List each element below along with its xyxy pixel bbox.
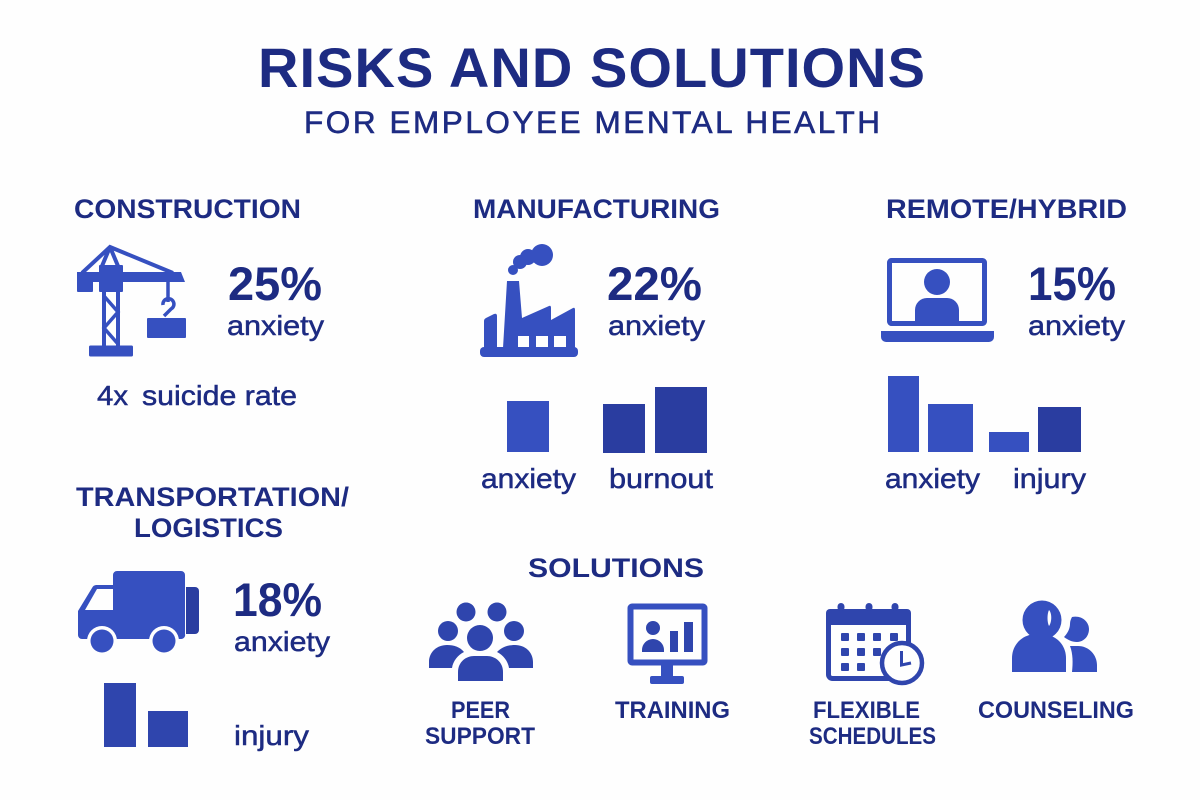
- label: peer support: PEER: [451, 697, 510, 724]
- bar chart: manufacturing: burnout: [609, 463, 713, 494]
- statistic: 25% anxiety: anxiety: [227, 310, 324, 341]
- panel: remote/hybrid: [881, 194, 1127, 494]
- label: peer support: [425, 697, 535, 750]
- statistic: 22% anxiety: [607, 257, 705, 341]
- icon: tower crane: [77, 247, 186, 356]
- label: counseling: COUNSELING: [978, 697, 1134, 724]
- label: peer support: SUPPORT: [425, 723, 535, 750]
- title: FOR EMPLOYEE MENTAL HEALTH: [304, 104, 880, 140]
- statistic: 15% anxiety: anxiety: [1028, 310, 1125, 341]
- icon: delivery truck: [78, 571, 199, 656]
- statistic: 22% anxiety: anxiety: [608, 310, 705, 341]
- bar chart: remote/hybrid: anxiety: [885, 463, 980, 494]
- statistic: 25% anxiety: 25%: [228, 257, 322, 310]
- label: flexible schedules: [809, 697, 936, 750]
- bar chart: manufacturing: [481, 387, 713, 494]
- statistic: 15% anxiety: [1028, 257, 1125, 341]
- label: flexible schedules: SCHEDULES: [809, 723, 936, 750]
- panel: transportation/logistics: [76, 482, 350, 751]
- statistic: 4x suicide rate: suicide rate: [142, 380, 297, 411]
- panel: manufacturing: [473, 194, 720, 494]
- panel: construction: [74, 194, 324, 411]
- label: training: TRAINING: [615, 697, 730, 724]
- bar chart: transportation: [104, 683, 309, 751]
- title: [258, 36, 925, 140]
- heading: solutions: SOLUTIONS: [528, 553, 704, 583]
- heading: manufacturing: MANUFACTURING: [473, 194, 720, 224]
- statistic: 18% anxiety: [233, 573, 330, 657]
- heading: transportation/logistics: TRANSPORTATION/: [76, 482, 350, 512]
- heading: construction: CONSTRUCTION: [74, 194, 301, 224]
- solution: training: [615, 606, 730, 724]
- bar chart: manufacturing: anxiety: [481, 463, 576, 494]
- solution: flexible schedules: [809, 603, 936, 750]
- title: RISKS AND SOLUTIONS: [258, 36, 925, 99]
- bar chart: remote/hybrid: injury: [1013, 463, 1086, 494]
- heading: transportation/logistics: [76, 482, 350, 543]
- icon: factory: [480, 244, 578, 357]
- label: flexible schedules: FLEXIBLE: [813, 697, 920, 724]
- icon: laptop video call: [881, 260, 994, 342]
- solution: peer support: [425, 602, 535, 750]
- solution: counseling: [978, 600, 1134, 724]
- statistic: 18% anxiety: 18%: [233, 573, 322, 626]
- heading: transportation/logistics: LOGISTICS: [134, 513, 283, 543]
- statistic: 25% anxiety: [227, 257, 324, 341]
- statistic: 15% anxiety: 15%: [1028, 257, 1116, 310]
- panel: solutions: [425, 553, 1134, 750]
- bar chart: transportation: injury: [234, 720, 309, 751]
- statistic: 4x suicide rate: 4x: [97, 380, 128, 411]
- icon: presentation monitor: [630, 606, 704, 684]
- icon: calendar with clock: [826, 603, 922, 683]
- bar chart: remote/hybrid: [885, 376, 1086, 494]
- heading: remote/hybrid: REMOTE/HYBRID: [886, 194, 1127, 224]
- statistic: 18% anxiety: anxiety: [234, 626, 330, 657]
- statistic: 22% anxiety: 22%: [607, 257, 702, 310]
- icon: counselor and client: [1012, 600, 1097, 672]
- icon: group of people: [429, 602, 533, 681]
